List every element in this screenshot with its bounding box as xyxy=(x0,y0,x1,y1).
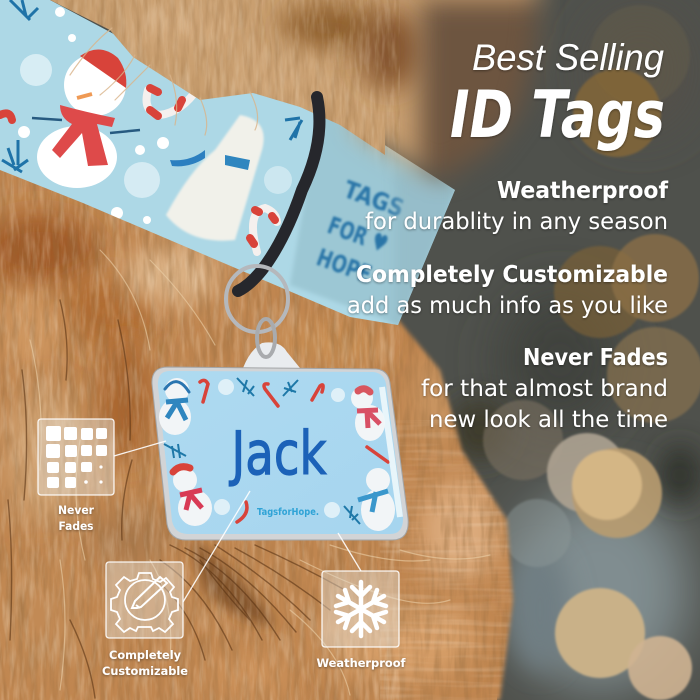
fir sprigs xyxy=(2,0,302,172)
feature: weatherproof: for durablity in any season xyxy=(365,209,668,235)
black D-ring xyxy=(238,97,319,291)
feature: completely customizable: add as much info as you like xyxy=(347,293,668,319)
feature: completely customizable: Completely Customizable xyxy=(356,262,668,288)
small ring and bail xyxy=(243,319,300,368)
feature: weatherproof xyxy=(365,178,669,235)
tag snowman scarves xyxy=(166,400,388,512)
collar lettering: FOR ♥ xyxy=(324,211,392,259)
light hair strokes xyxy=(30,250,490,695)
fur: dog chest xyxy=(0,170,516,700)
collar lettering: TAGS xyxy=(340,175,408,223)
tag snowmen xyxy=(159,378,395,531)
feature: never fades: Never Fades xyxy=(523,345,668,371)
candy canes xyxy=(0,84,277,252)
fur hair strokes xyxy=(8,300,345,698)
label: weatherproof: Weatherproof xyxy=(316,656,406,670)
tag face xyxy=(158,371,403,534)
snowman on collar xyxy=(32,49,140,188)
feature: weatherproof: Weatherproof xyxy=(497,178,669,204)
tag candy canes xyxy=(200,380,388,522)
gear with pencil xyxy=(111,573,178,632)
feature: never fades xyxy=(421,345,668,433)
label: never fades: Never xyxy=(58,503,94,517)
tag flakes xyxy=(214,379,345,518)
stitched snowman on collar xyxy=(166,115,264,241)
label: completely customizable: Completely xyxy=(109,648,181,662)
feature: never fades: new look all the time xyxy=(429,407,668,433)
wispy hairs over collar xyxy=(70,28,258,135)
tag earmuffs and hats xyxy=(165,382,370,472)
feature: never fades: for that almost brand xyxy=(421,376,668,402)
tag sprigs xyxy=(164,378,360,524)
icon box: never fades xyxy=(38,419,114,495)
label: never fades: Fades xyxy=(58,519,94,533)
icon box: completely customizable xyxy=(106,562,183,638)
snowflake xyxy=(336,582,386,636)
fur: neck above collar xyxy=(50,0,554,194)
bokeh lights xyxy=(483,5,700,700)
tag name: Jack xyxy=(228,419,327,489)
label: completely customizable: Customizable xyxy=(102,664,188,678)
label: completely customizable xyxy=(102,648,188,678)
tag brand: TagsforHope. xyxy=(257,507,319,518)
collar: snowman fabric xyxy=(0,0,460,330)
snowflakes and dots xyxy=(18,7,292,224)
label: never fades xyxy=(58,503,94,533)
tag gloss highlight xyxy=(382,387,400,517)
split ring xyxy=(226,266,288,332)
tag xyxy=(152,367,408,540)
collar lettering xyxy=(316,178,404,284)
collar lettering: HOPE xyxy=(313,243,375,289)
fading dot grid xyxy=(46,426,107,488)
title xyxy=(450,37,665,153)
feature: completely customizable xyxy=(347,262,668,319)
icon box: weatherproof xyxy=(322,571,399,647)
callout lines xyxy=(114,441,361,602)
title: Best Selling xyxy=(472,37,664,78)
